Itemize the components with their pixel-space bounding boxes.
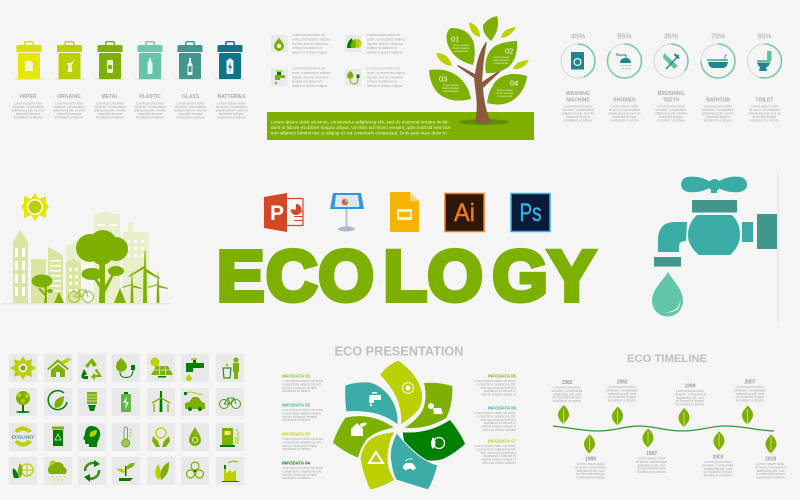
- bin descriptions: eiusmod tempor: [219, 112, 245, 116]
- infodata 01: consectetur adipiscing elit,: [282, 382, 322, 386]
- bin descriptions: incididunt ut labore: [136, 116, 164, 120]
- bin descriptions: eiusmod tempor: [16, 112, 41, 116]
- bin descriptions: eiusmod tempor: [138, 112, 163, 116]
- infodata 07: sed do eiusmod tempor: [481, 451, 517, 455]
- milestone 1999: incididunt ut labore: [676, 403, 704, 407]
- bin descriptions: eiusmod tempor: [178, 112, 204, 116]
- milestone 1999: do eiusmod tempor: [675, 399, 705, 403]
- bin: organic: [54, 41, 86, 80]
- tree text blocks: ing elit, sed do eiusmod: [292, 42, 328, 46]
- bicycle: [68, 290, 94, 302]
- milestone 2018: adipiscing elit, sed: [757, 469, 784, 473]
- panel: water usage: [561, 34, 782, 122]
- tree text blocks: ing elit, sed do eiusmod: [367, 75, 403, 79]
- bin descriptions: sit amet, consectetur: [175, 105, 207, 109]
- milestone 1992: Lorem ipsum dolor: [608, 385, 637, 389]
- gauge: brushing teeth: 35%: [664, 34, 678, 40]
- icon: water tap: [652, 173, 779, 322]
- gauge descriptions: Lorem ipsum dolor: [610, 104, 639, 108]
- infodata 01: incididunt ut labore: [282, 389, 311, 393]
- bin descriptions: incididunt ut labore: [14, 116, 42, 120]
- panel: eco tree: [267, 16, 534, 140]
- gauge descriptions: eiusmod tempor: [612, 115, 638, 119]
- tree text blocks: ing elit, sed do eiusmod: [367, 42, 403, 46]
- icon: PowerPoint: [264, 193, 303, 232]
- milestone 1982: do eiusmod tempor: [552, 396, 582, 400]
- infodata 02: consectetur adipiscing elit,: [282, 411, 322, 415]
- bin descriptions: Lorem ipsum dolor: [55, 102, 84, 106]
- leaf 03: 03: [439, 74, 447, 84]
- milestone 1992: [606, 380, 639, 426]
- gauge descriptions: incididunt ut labore: [610, 118, 639, 122]
- milestone 1989: sit amet, consectetur: [575, 465, 607, 469]
- infodata 06: incididunt ut labore et: [484, 421, 516, 425]
- gauge descriptions: eiusmod tempor: [706, 115, 731, 119]
- bin labels: [20, 94, 246, 100]
- icon: solar panel: [428, 403, 443, 414]
- icon: leaf globe: [345, 35, 362, 52]
- milestone 1989: incididunt ut labore: [576, 476, 605, 480]
- bin: metal: [94, 41, 126, 80]
- milestone 2003: Lorem ipsum dolor: [704, 460, 733, 464]
- infodata 01: sed do eiusmod tempor: [282, 386, 318, 390]
- leaf 04: Lorem ipsum: [497, 88, 514, 92]
- bin descriptions: incididunt ut labore: [217, 116, 246, 120]
- leaf 02: 02: [505, 46, 513, 56]
- infodata 02: [282, 402, 324, 422]
- milestone 2007: [734, 380, 767, 424]
- bin descriptions: sit amet, consectetur: [134, 105, 167, 109]
- petal: bottom left: [360, 432, 395, 490]
- bin descriptions: Lorem ipsum dolor: [176, 102, 205, 106]
- infodata 04: [282, 460, 324, 480]
- chart: flower petals: [332, 360, 466, 490]
- infodata 07: INFODATA 07: [488, 438, 517, 444]
- bin labels: ORGANIC: [57, 94, 81, 100]
- leaf 04: 04: [510, 78, 518, 88]
- tree text blocks: Lorem ipsum dolor sit: [292, 33, 324, 37]
- bin descriptions: Lorem ipsum dolor: [14, 102, 43, 106]
- green banner: [267, 112, 534, 140]
- title: ECOLOGY: ECOLOGY: [217, 238, 595, 316]
- tree text blocks: labore et dolore magna: [292, 84, 327, 88]
- big tree: [76, 230, 128, 303]
- infodata 07: incididunt ut labore et: [484, 454, 516, 458]
- icon: house: [351, 423, 367, 436]
- row 3 icons: [9, 423, 244, 451]
- tree text blocks: tempor incididunt ut: [292, 46, 322, 50]
- bin descriptions: sit amet, consectetur: [94, 105, 127, 109]
- icon: sun: [402, 382, 414, 394]
- gauge descriptions: sit amet, consectetur: [562, 108, 595, 112]
- infodata 05: sed do eiusmod tempor: [481, 386, 517, 390]
- bin labels: METAL: [102, 94, 118, 100]
- gauge: washing machine: 45%: [571, 34, 585, 40]
- icon: tap: [271, 69, 288, 86]
- milestone 1999: adipiscing elit, sed: [676, 396, 704, 400]
- milestone 2018: sit amet, consectetur: [755, 465, 787, 469]
- infodata 07: Lorem ipsum dolor sit amet,: [474, 444, 516, 448]
- icon: Photoshop: Ps: [520, 199, 542, 227]
- bin: paper: [13, 41, 45, 80]
- milestone 1997: incididunt ut labore: [637, 470, 666, 474]
- bin descriptions: eiusmod tempor: [98, 112, 123, 116]
- panel: recycling bins: [12, 41, 248, 120]
- infodata 02: sed do eiusmod tempor: [282, 415, 318, 419]
- infodata 02: INFODATA 02: [282, 402, 311, 408]
- infodata 05: Lorem ipsum dolor sit amet,: [474, 379, 516, 383]
- leaf 01: [446, 28, 475, 65]
- milestone 1989: 1989: [585, 456, 596, 462]
- infodata 02: incididunt ut labore: [282, 418, 311, 422]
- petal: bottom right: [390, 433, 438, 490]
- green banner: tion ullamco laboris nisi ut aliquip ex ea commodo consequat. Duis aute irure dolor in: [271, 130, 447, 136]
- tree text blocks: labore et dolore magna: [367, 84, 402, 88]
- bin descriptions: adipiscing elit, sed do: [215, 108, 248, 112]
- infodata 05: [474, 374, 517, 397]
- infodata 06: Lorem ipsum dolor sit amet,: [474, 411, 516, 415]
- milestone 2003: do eiusmod tempor: [703, 470, 733, 474]
- infodata 04: consectetur adipiscing elit,: [282, 469, 322, 473]
- icon: tap: [369, 392, 381, 406]
- gauge labels: WASHING: [566, 91, 590, 97]
- row 1 icons: [9, 354, 244, 382]
- milestone 1992: do eiusmod tempor: [607, 395, 637, 399]
- infodata 04: Lorem ipsum dolor sit amet,: [282, 466, 324, 470]
- bin descriptions: incididunt ut labore: [96, 116, 124, 120]
- bin labels: BATTERIES: [218, 94, 246, 100]
- gauge descriptions: incididunt ut labore: [564, 118, 592, 122]
- gauge: toilet: 55%: [757, 34, 772, 40]
- leaf 01: Lorem ipsum: [453, 43, 470, 47]
- tree illustration: [429, 16, 529, 124]
- row 4 icons: [9, 457, 244, 485]
- bin descriptions: Lorem ipsum dolor: [96, 102, 125, 106]
- infodata 04: incididunt ut labore: [282, 476, 311, 480]
- gauge labels: TOILET: [756, 98, 773, 104]
- tree text blocks: tempor incididunt ut: [367, 80, 397, 84]
- milestone 2003: 2003: [712, 454, 724, 460]
- petal: right: [402, 419, 466, 461]
- buildings: [13, 212, 149, 303]
- tree text blocks: Lorem ipsum dolor sit: [367, 33, 399, 37]
- milestone 2003: adipiscing elit, sed: [704, 467, 732, 471]
- milestone 1997: 1997: [646, 451, 657, 457]
- milestone 1992: sit amet, consectetur: [606, 388, 639, 392]
- milestone 1989: do eiusmod tempor: [576, 472, 606, 476]
- milestone 1992: adipiscing elit, sed: [608, 392, 636, 396]
- gauge: toilet: [748, 34, 782, 78]
- gauge descriptions: sit amet, consectetur: [702, 108, 735, 112]
- gauge descriptions: adipiscing elit, sed do: [748, 112, 781, 116]
- milestone 1999: Lorem ipsum dolor: [676, 389, 705, 393]
- milestone 1999: [674, 384, 707, 427]
- icon: PowerPoint: P: [270, 202, 284, 225]
- bin descriptions: Lorem ipsum dolor: [217, 102, 246, 106]
- gauge labels: MACHINE: [566, 98, 590, 104]
- tree text blocks: amet, consectetur adipisc: [367, 71, 406, 75]
- milestone 1989: [575, 434, 607, 480]
- milestone 1997: sit amet, consectetur: [636, 460, 668, 464]
- milestone 1982: Lorem ipsum dolor: [553, 386, 582, 390]
- milestone 2018: Lorem ipsum dolor: [756, 462, 785, 466]
- infodata 05: incididunt ut labore et: [484, 389, 516, 393]
- leaf 01: consectetur: [454, 49, 468, 53]
- icon: leaf plug: [345, 69, 362, 86]
- milestone 1989: Lorem ipsum dolor: [576, 462, 605, 466]
- gauge: shower: 85%: [617, 34, 632, 40]
- bin descriptions: incididunt ut labore: [55, 116, 83, 120]
- bin descriptions: incididunt ut labore: [176, 116, 205, 120]
- green banner: Lorem ipsum dolor sit amet, consectetur adipiscing elit, sed do eiusmod tempor incidi-: [271, 120, 449, 124]
- infodata 06: consectetur adipiscing elit,: [476, 414, 516, 418]
- milestone 2018: incididunt ut labore: [756, 476, 785, 480]
- gauge: bathtub: [701, 34, 735, 78]
- leaf 01: 01: [451, 34, 459, 44]
- milestone 2007: Lorem ipsum dolor: [736, 385, 765, 389]
- infodata 05: INFODATA 05: [488, 374, 517, 378]
- icon: sun: [21, 193, 49, 221]
- milestone 2018: do eiusmod tempor: [756, 472, 786, 476]
- milestone 2003: [702, 432, 735, 478]
- milestone 1982: 1982: [561, 380, 573, 386]
- gauge descriptions: Lorem ipsum dolor: [704, 104, 733, 108]
- leaf 02: dolor sit amet: [493, 58, 510, 62]
- bin descriptions: adipiscing elit, sed do: [94, 108, 126, 112]
- bin descriptions: sit amet, consectetur: [12, 105, 45, 109]
- gauge descriptions: sit amet, consectetur: [655, 108, 688, 112]
- infodata 03: Lorem ipsum dolor sit amet,: [282, 437, 324, 441]
- milestone 1992: incididunt ut labore: [608, 399, 636, 403]
- tree text blocks: amet, consectetur adipisc: [292, 37, 331, 41]
- gauge descriptions: eiusmod tempor: [659, 115, 684, 119]
- infodata 06: dolore magna aliqua ut: [482, 425, 516, 429]
- gauge descriptions: eiusmod tempor: [752, 115, 778, 119]
- bin descriptions: [12, 102, 248, 120]
- gauge descriptions: adipiscing elit, sed do: [562, 112, 594, 116]
- gauge descriptions: sit amet, consectetur: [609, 108, 641, 112]
- infodata 03: sed do eiusmod tempor: [282, 444, 318, 448]
- green banner: dunt ut labore et dolore magna aliqua. Ut enim ad minim veniam, quis nostrud exercita-: [271, 125, 452, 130]
- gauge descriptions: adipiscing elit, sed do: [655, 112, 687, 116]
- milestone 1997: Lorem ipsum dolor: [637, 456, 666, 460]
- gauge descriptions: Lorem ipsum dolor: [750, 104, 779, 108]
- infodata 01: INFODATA 01: [282, 374, 311, 378]
- milestone 1999: 1999: [684, 384, 696, 390]
- leaf 04: dolor sit amet: [497, 91, 514, 95]
- bin descriptions: sit amet, consectetur: [216, 105, 248, 109]
- pine trees: [54, 288, 126, 303]
- infodata 02: Lorem ipsum dolor sit amet,: [282, 408, 324, 412]
- petal: upper right: [403, 382, 453, 429]
- milestone 1982: [551, 380, 584, 424]
- milestone 2007: sit amet, consectetur: [734, 388, 767, 392]
- petal: top: [380, 360, 423, 425]
- gauge: brushing teeth: [654, 34, 688, 78]
- milestone 1997: adipiscing elit, sed: [638, 463, 665, 467]
- tree text blocks: tempor incididunt ut: [292, 80, 322, 84]
- milestone 1982: sit amet, consectetur: [551, 389, 584, 393]
- petal icons: [351, 382, 444, 470]
- milestone 1999: sit amet, consectetur: [674, 392, 707, 396]
- leaf 04: consectetur: [498, 94, 512, 98]
- icon: globe leaf: [431, 437, 444, 449]
- infodata 03: consectetur adipiscing elit,: [282, 440, 322, 444]
- tree text blocks: Lorem ipsum dolor sit: [367, 66, 399, 70]
- gauge: shower: [608, 34, 642, 78]
- milestone 2007: incididunt ut labore: [736, 399, 764, 403]
- milestone 2007: do eiusmod tempor: [735, 395, 765, 399]
- gauge descriptions: incididunt ut labore: [704, 118, 732, 122]
- gauge labels: BRUSHING: [658, 91, 684, 97]
- milestone 2007: adipiscing elit, sed: [736, 392, 764, 396]
- milestone 1982: incididunt ut labore: [553, 399, 581, 403]
- icon: Google Slides: [390, 192, 419, 232]
- panel: green city: [2, 193, 170, 304]
- tree text blocks: labore et dolore magna: [292, 51, 327, 55]
- bin descriptions: eiusmod tempor: [57, 112, 82, 116]
- gauge descriptions: incididunt ut labore: [657, 118, 685, 122]
- gauge: bathtub: 75%: [711, 34, 725, 40]
- infodata 03: incididunt ut labore: [282, 447, 311, 451]
- tree text blocks: tempor incididunt ut: [367, 46, 397, 50]
- gauge descriptions: Lorem ipsum dolor: [657, 104, 686, 108]
- milestone 1982: adipiscing elit, sed: [553, 392, 581, 396]
- infodata 05: consectetur adipiscing elit,: [476, 382, 516, 386]
- gauge descriptions: [562, 104, 781, 122]
- infodata 01: [282, 374, 324, 393]
- leaf 04: [487, 74, 527, 105]
- gauge descriptions: sit amet, consectetur: [749, 108, 781, 112]
- leaf 03: Lorem ipsum: [443, 83, 460, 87]
- milestone 1997: do eiusmod tempor: [637, 467, 667, 471]
- infodata 04: sed do eiusmod tempor: [282, 473, 318, 477]
- tree text blocks: amet, consectetur adipisc: [292, 71, 331, 75]
- infodata 07: [474, 438, 517, 465]
- infodata 07: dolore magna aliqua ut: [482, 458, 516, 462]
- leaf 03: consectetur: [444, 89, 458, 93]
- row 3 icons: ECOLOGY: [12, 434, 34, 440]
- bin descriptions: adipiscing elit, sed do: [12, 108, 44, 112]
- gauge descriptions: eiusmod tempor: [566, 115, 591, 119]
- tree text blocks: labore et dolore magna: [367, 51, 402, 55]
- bin labels: PAPER: [20, 94, 37, 100]
- tree text blocks: ing elit, sed do eiusmod: [292, 75, 328, 79]
- panel: icon grid: [9, 354, 244, 485]
- tree text blocks: Lorem ipsum dolor sit: [292, 66, 324, 70]
- icon: recycle: [369, 452, 383, 463]
- petal: left: [332, 416, 395, 458]
- infodata 06: sed do eiusmod tempor: [481, 418, 517, 422]
- heading: eco timeline: ECO TIMELINE: [627, 353, 707, 365]
- milestone 2007: 2007: [744, 380, 756, 386]
- milestone 1992: 1992: [616, 380, 628, 386]
- infodata 06: INFODATA 06: [488, 406, 517, 410]
- infodata 03: [282, 432, 324, 451]
- milestone 1989: adipiscing elit, sed: [577, 469, 604, 473]
- wind turbines: [122, 250, 168, 303]
- row 2 icons: [9, 388, 244, 416]
- leaf 02: [485, 41, 517, 73]
- gauge labels: BATHTUB: [706, 98, 730, 104]
- infodata 05: dolore magna aliqua ut: [482, 393, 516, 397]
- petal: upper left: [345, 382, 398, 425]
- milestone 2018: 2018: [765, 456, 776, 462]
- milestone 1997: [636, 428, 668, 474]
- icon: Illustrator: Ai: [454, 199, 475, 227]
- panel: software icons: [264, 192, 550, 232]
- icon: Photoshop: [511, 194, 550, 232]
- milestone 2018: [755, 434, 787, 480]
- bin descriptions: Lorem ipsum dolor: [136, 102, 165, 106]
- infodata 04: INFODATA 04: [282, 460, 311, 466]
- heading: eco presentation: ECO PRESENTATION: [334, 344, 464, 358]
- bin: batteries: [214, 41, 246, 80]
- infodata 07: consectetur adipiscing elit,: [476, 447, 516, 451]
- leaf 02: Lorem ipsum: [493, 55, 510, 59]
- infodata 03: INFODATA 03: [282, 432, 311, 436]
- gauge descriptions: adipiscing elit, sed do: [702, 112, 734, 116]
- tree text blocks: amet, consectetur adipisc: [367, 37, 406, 41]
- infodata 06: [474, 406, 517, 432]
- gauge labels: SHOWER: [613, 98, 636, 104]
- leaf 01: dolor sit amet: [453, 46, 470, 50]
- bin descriptions: adipiscing elit, sed do: [53, 108, 85, 112]
- icon: Keynote: [330, 193, 364, 232]
- milestone 2003: sit amet, consectetur: [702, 463, 735, 467]
- infodata 07: enim ad minim veniam: [482, 461, 516, 465]
- bin: plastic: [134, 41, 166, 80]
- infodata 06: enim ad minim veniam: [482, 428, 516, 432]
- gauge labels: [566, 91, 773, 104]
- bin descriptions: sit amet, consectetur: [53, 105, 86, 109]
- tree text blocks: [292, 33, 406, 88]
- gauge descriptions: incididunt ut labore: [750, 118, 779, 122]
- leaf 02: consectetur: [494, 61, 508, 65]
- chart: timeline: [551, 380, 787, 480]
- icon: water drop: [271, 35, 288, 52]
- icon: car: [403, 459, 416, 470]
- milestone 2003: incididunt ut labore: [704, 474, 732, 478]
- icon: Illustrator: [445, 194, 484, 232]
- small tree: [32, 274, 53, 303]
- infodata 01: Lorem ipsum dolor sit amet,: [282, 379, 324, 383]
- leaf 03: dolor sit amet: [443, 86, 460, 90]
- gauge: washing machine: [561, 34, 595, 78]
- gauge labels: TEETH: [663, 98, 680, 104]
- bin labels: GLASS: [182, 94, 200, 100]
- ground line: [2, 303, 170, 304]
- gauge descriptions: adipiscing elit, sed do: [608, 112, 641, 116]
- bin descriptions: adipiscing elit, sed do: [174, 108, 207, 112]
- gauge descriptions: Lorem ipsum dolor: [564, 104, 593, 108]
- bin descriptions: adipiscing elit, sed do: [134, 108, 166, 112]
- leaf 03: [429, 69, 471, 101]
- bin labels: PLASTIC: [139, 94, 161, 100]
- bin: glass: [174, 41, 206, 80]
